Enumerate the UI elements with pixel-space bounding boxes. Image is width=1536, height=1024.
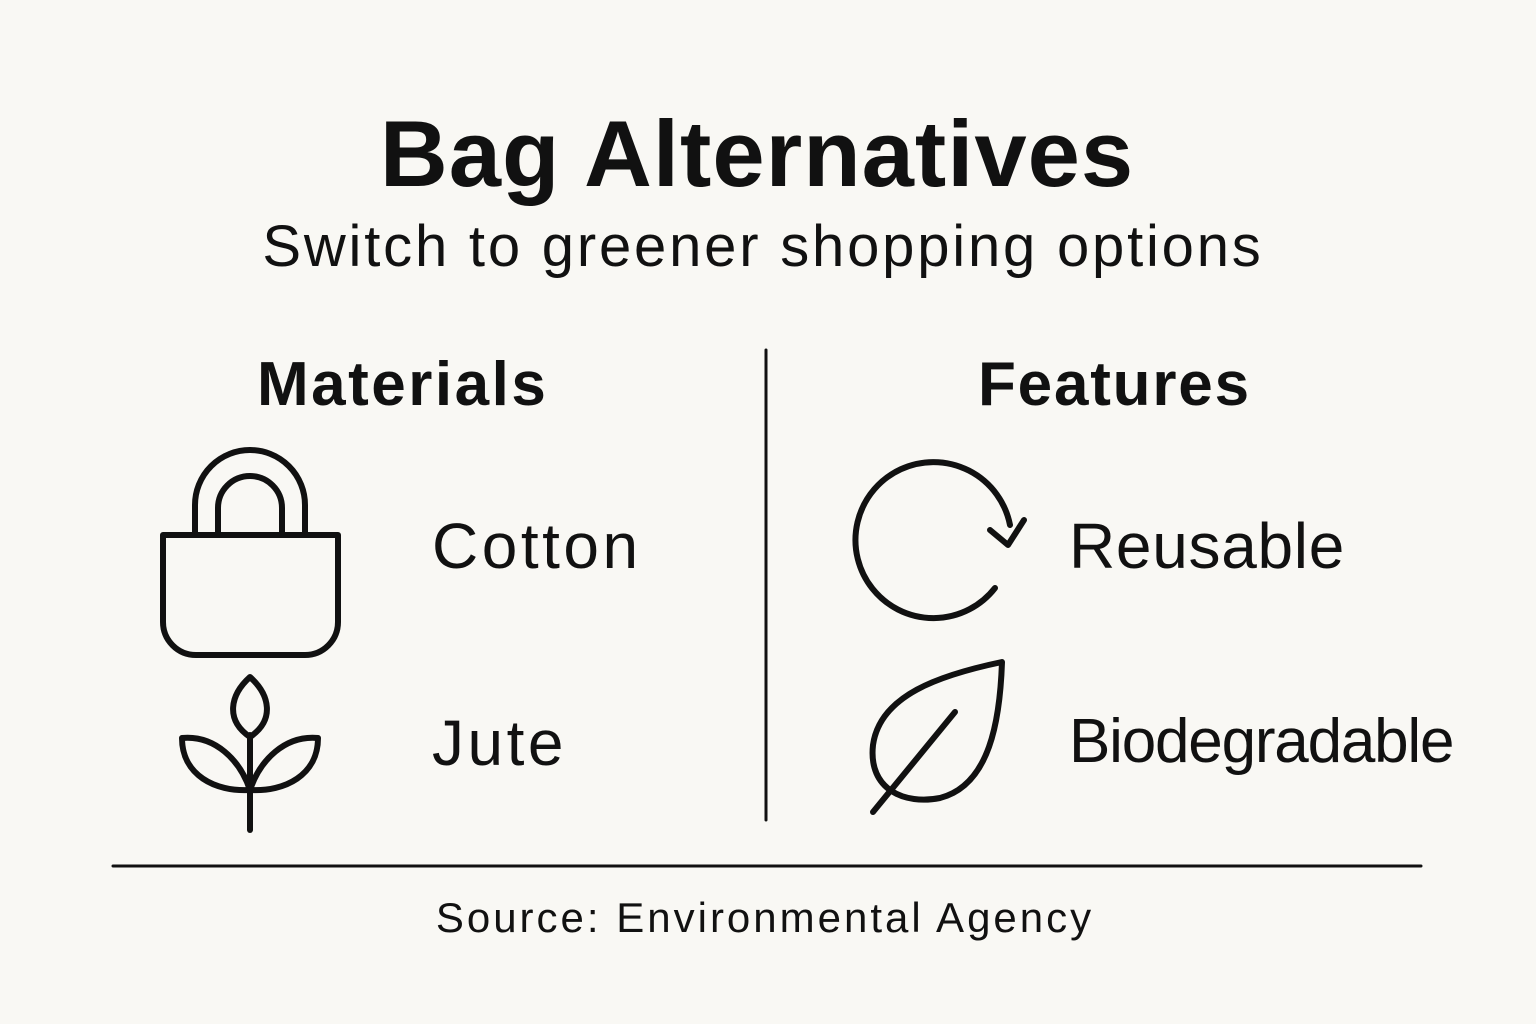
source: Source: Environmental Agency	[436, 894, 1094, 941]
label: biodegradable: Biodegradable	[1069, 707, 1453, 776]
title: Bag Alternatives	[380, 101, 1134, 206]
icon: jute plant	[182, 677, 318, 830]
icon: leaf	[873, 662, 1002, 812]
label: cotton: Cotton	[432, 510, 642, 582]
icon: cotton bag	[163, 450, 338, 655]
label: jute: Jute	[432, 707, 567, 779]
label: reusable: Reusable	[1069, 510, 1345, 582]
heading: features: Features	[978, 350, 1251, 419]
heading: materials: Materials	[257, 350, 548, 419]
icon: reusable arrow	[855, 462, 1024, 618]
subtitle: Switch to greener shopping options	[262, 214, 1264, 279]
